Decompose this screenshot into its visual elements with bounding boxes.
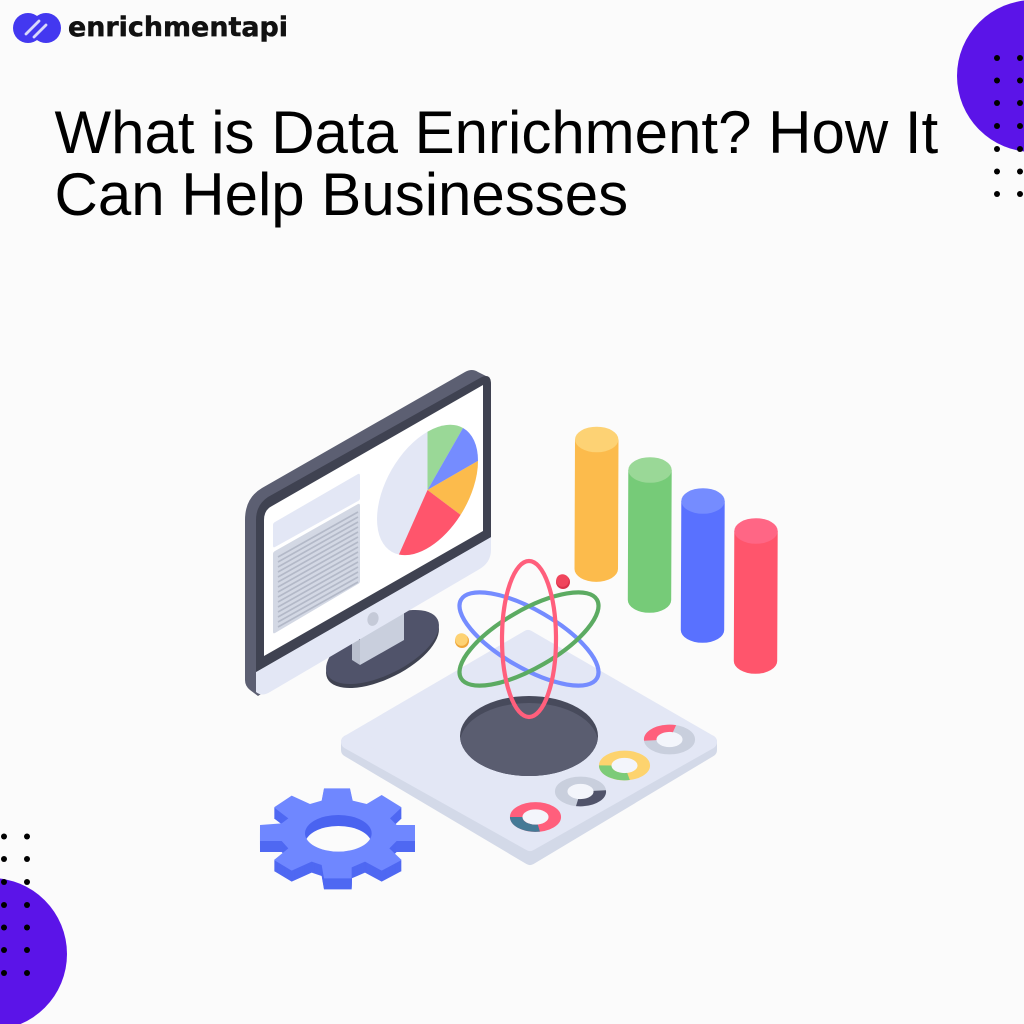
platform side bbox=[348, 742, 710, 858]
icon: logo mark bbox=[13, 13, 61, 43]
platform top bbox=[348, 637, 710, 844]
green orbit bbox=[447, 575, 611, 703]
red orbit bbox=[502, 561, 556, 717]
logo wordmark: enrichmentapi bbox=[68, 12, 288, 43]
pie chart bbox=[377, 403, 478, 577]
blue cylinder bbox=[681, 488, 725, 643]
title: What is Data Enrichment? How It bbox=[54, 99, 938, 166]
bar cylinders bbox=[574, 427, 778, 674]
platform hole bbox=[460, 696, 598, 783]
yellow cylinder bbox=[574, 427, 618, 582]
title bbox=[54, 99, 955, 228]
logo: enrichmentapi bbox=[13, 12, 288, 43]
monitor screen bbox=[264, 385, 483, 656]
blue orbit bbox=[447, 575, 611, 703]
monitor outer shell bbox=[245, 370, 491, 696]
monitor dark frame bbox=[256, 376, 491, 672]
decoration: bottom left circle with dots bbox=[0, 834, 67, 1024]
atom orbits bbox=[447, 561, 611, 717]
atom particle: yellow bbox=[455, 633, 469, 648]
donut: red and gray bbox=[649, 727, 690, 752]
atom particle: red bbox=[556, 574, 570, 589]
screen text block bbox=[273, 504, 360, 633]
donut: gray and dark bbox=[560, 779, 601, 804]
green cylinder bbox=[628, 457, 672, 613]
monitor neck bbox=[352, 600, 404, 665]
monitor chin bbox=[256, 537, 491, 694]
donut: yellow and green bbox=[602, 752, 647, 779]
red cylinder bbox=[734, 518, 778, 674]
decoration: top right circle with dots bbox=[957, 0, 1024, 197]
monitor logo button bbox=[366, 611, 380, 627]
title: Can Help Businesses bbox=[54, 161, 628, 228]
screen text header box bbox=[273, 474, 360, 547]
icon: gear bbox=[260, 788, 415, 889]
monitor illustration bbox=[245, 370, 491, 703]
donut: red and teal bbox=[513, 804, 558, 830]
monitor stand base bbox=[315, 595, 450, 703]
isometric base platform bbox=[348, 637, 710, 858]
